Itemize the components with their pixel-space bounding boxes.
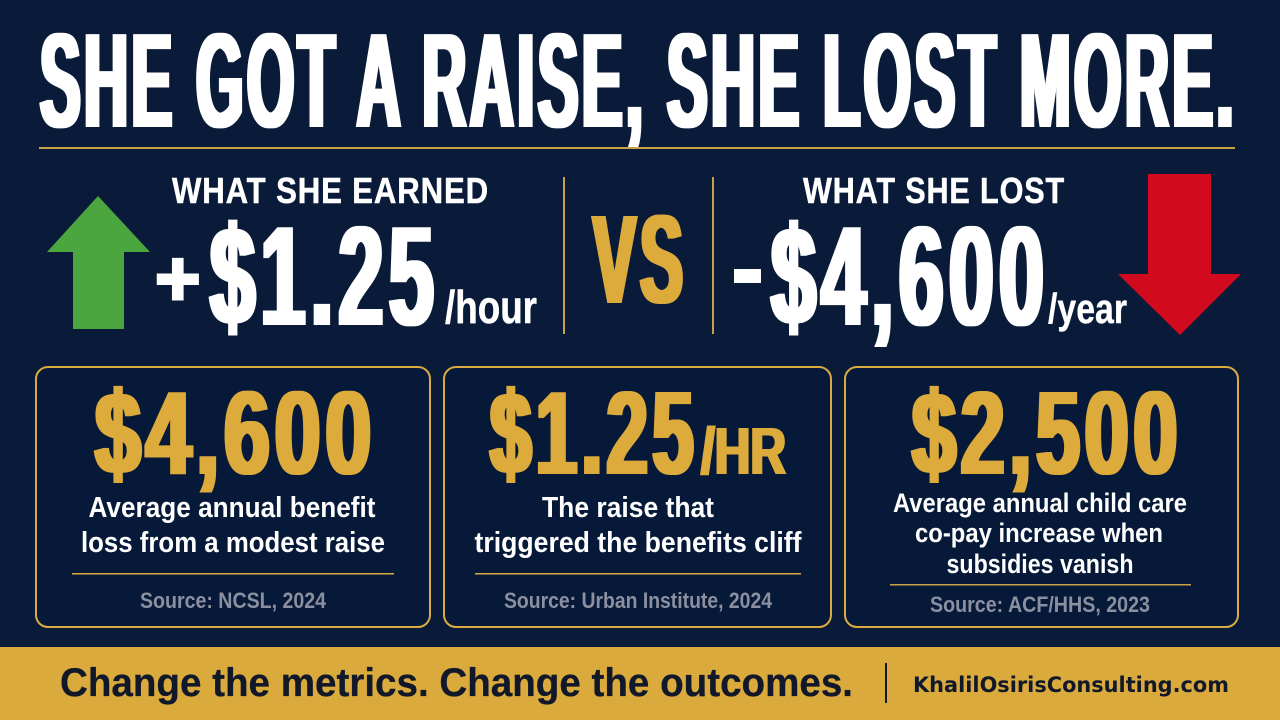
stat source: Source: NCSL, 2024 [140,588,327,613]
stat description [81,492,385,559]
stat source: Source: ACF/HHS, 2023 [930,592,1150,617]
stat source: Source: Urban Institute, 2024 [504,588,773,613]
panel: stat 2500 [845,367,1238,627]
plus sign: + [155,234,201,322]
panel: stat 4600 [36,367,430,627]
stat description: triggered the benefits cliff [474,527,802,559]
icon: red down arrow [1118,174,1241,335]
icon: green up arrow [47,196,150,329]
stat description: Average annual child care [893,488,1187,518]
footer website: KhalilOsirisConsulting.com [913,673,1229,697]
panel: what she earned [47,170,537,356]
stat description: Average annual benefit [88,492,376,524]
stat unit: /HR [701,414,786,489]
stat value: $1.25 [490,367,698,500]
footer band [0,647,1280,720]
stat description [893,488,1187,579]
lost amount: $4,600 [771,197,1049,356]
stat description: subsidies vanish [946,549,1134,579]
heading: what she earned: WHAT SHE EARNED [172,170,489,211]
stat description: co-pay increase when [915,518,1163,548]
panel: stat 1.25 [444,367,831,627]
panel: what she lost [734,170,1241,356]
stat description [474,492,802,559]
earned unit: /hour [445,281,537,333]
stat description: loss from a modest raise [81,527,385,559]
lost unit: /year [1048,285,1127,332]
earned amount: $1.25 [210,197,439,356]
versus label: VS [593,189,687,330]
footer tagline: Change the metrics. Change the outcomes. [60,661,853,705]
stat value: $4,600 [95,367,376,500]
stat description: The raise that [542,492,714,524]
minus sign [734,269,761,283]
heading: what she lost: WHAT SHE LOST [803,170,1065,211]
